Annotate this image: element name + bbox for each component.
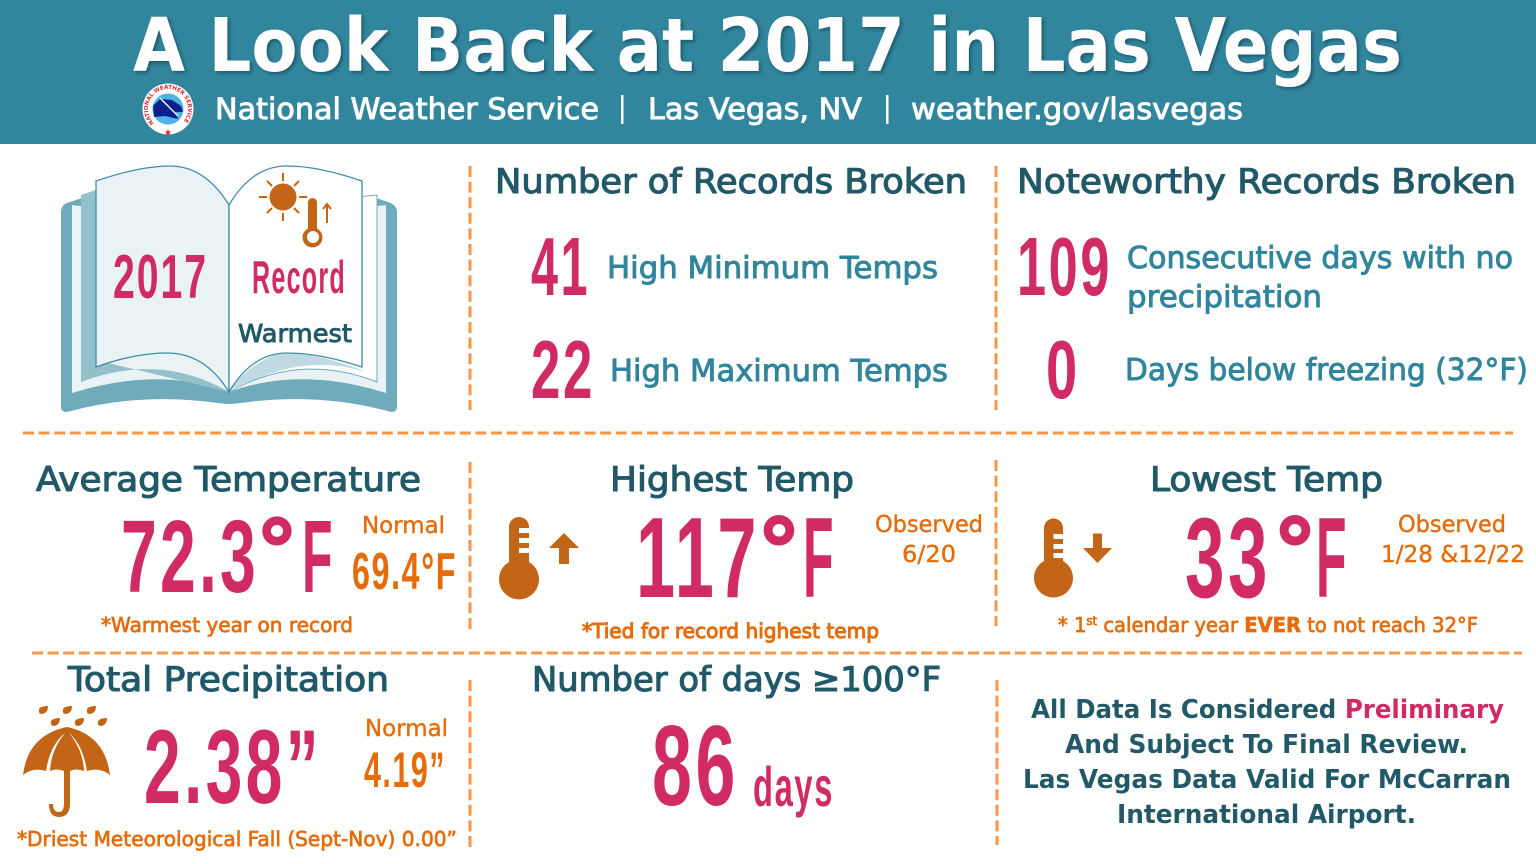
panel: lowest temp: F: [1316, 495, 1349, 622]
observed date: Observed: [875, 512, 983, 538]
heading: Number of Records Broken: [495, 162, 967, 202]
icon: sun: [259, 173, 307, 221]
disclaimer note: [1023, 695, 1511, 830]
icon: thermometer with down arrow: [1034, 518, 1112, 598]
label: precipitation: [1127, 280, 1322, 315]
label: [1127, 241, 1513, 315]
footnote: calendar year: [1097, 613, 1244, 637]
stat: 117°F: °: [757, 500, 801, 603]
icon: thermometer with up arrow: [499, 517, 579, 599]
stat: 41: 41: [531, 220, 590, 313]
stat: 72.3°F: 72.3: [121, 499, 259, 614]
panel: average temperature: [36, 460, 457, 637]
footnote: *Driest Meteorological Fall (Sept-Nov) 0.00”: [17, 827, 457, 851]
subtitle line: National Weather Service: [215, 92, 599, 126]
panel: average temperature: F: [302, 499, 335, 614]
stat: 72.3°F: °: [256, 502, 298, 600]
dividers: [23, 166, 1522, 848]
observed dates: [1381, 512, 1525, 568]
normal value: 4.19”: [364, 742, 446, 798]
header banner: [0, 0, 1536, 144]
stat: 117°F: 117: [636, 495, 760, 622]
panel: number of records broken: [495, 162, 967, 416]
observed date: [875, 512, 983, 568]
disclaimer note: Las Vegas Data Valid For McCarran: [1023, 765, 1511, 795]
subtitle line: Las Vegas, NV: [648, 92, 862, 126]
label: Consecutive days with no: [1127, 241, 1513, 276]
disclaimer note: All Data Is Considered Preliminary: [1031, 695, 1504, 725]
heading: Average Temperature: [36, 460, 421, 500]
disclaimer note: And Subject To Final Review.: [1065, 730, 1468, 760]
label: Days below freezing (32°F): [1125, 353, 1528, 388]
footnote: EVER to not reach 32°F: [1244, 613, 1482, 637]
panel: highest temp: F: [803, 495, 836, 622]
stat: 33°F: 33: [1185, 495, 1271, 622]
icon: umbrella with rain: [23, 706, 110, 817]
title: A Look Back at 2017 in Las Vegas: [133, 3, 1402, 89]
panel: lowest temp: [1034, 460, 1525, 637]
stat: 2.38 inches: 2.38”: [144, 709, 322, 826]
footnote: * 1: [1058, 613, 1087, 637]
icon: National Weather Service logo: NATIONAL WEATHER SERVICE: [144, 84, 192, 126]
stat: 33°F: °: [1273, 500, 1317, 603]
book label: Record: Record: [252, 251, 346, 303]
footnote: *Tied for record highest temp: [582, 619, 879, 643]
heading: Number of days ≥100°F: [532, 660, 941, 700]
book label: Warmest: Warmest: [238, 319, 352, 348]
panel: highest temp: [499, 460, 983, 643]
heading: Total Precipitation: [67, 660, 389, 700]
panel: days at or above 100°F: [532, 660, 941, 830]
icon: open book with 2017 record warmest: [61, 166, 397, 412]
normal label: Normal: [362, 513, 445, 539]
observed dates: Observed: [1398, 512, 1506, 538]
footnote: *Warmest year on record: [101, 613, 353, 637]
subtitle line: weather.gov/lasvegas: [911, 92, 1243, 126]
label: High Minimum Temps: [607, 251, 938, 286]
label: High Maximum Temps: [610, 354, 948, 389]
normal value: 69.4°F: [352, 543, 457, 601]
stat: 109: 109: [1017, 220, 1112, 313]
observed dates: 1/28 &12/22: [1381, 542, 1525, 568]
icon: thermometer rising: [302, 198, 331, 247]
stat: 0: 0: [1046, 323, 1080, 416]
panel: noteworthy records broken: [1017, 162, 1528, 416]
unit: days: [753, 755, 834, 818]
normal label: Normal: [365, 716, 448, 742]
stat: 22: 22: [531, 323, 595, 416]
disclaimer note: International Airport.: [1117, 800, 1416, 830]
subtitle line: [215, 92, 1243, 126]
heading: Highest Temp: [610, 460, 854, 500]
observed date: 6/20: [902, 542, 956, 568]
heading: Noteworthy Records Broken: [1017, 162, 1516, 202]
heading: Lowest Temp: [1150, 460, 1383, 500]
panel: total precipitation: [17, 660, 457, 851]
stat: 86: 86: [652, 703, 739, 830]
book label: 2017: 2017: [113, 243, 208, 312]
footnote: st: [1086, 614, 1097, 628]
